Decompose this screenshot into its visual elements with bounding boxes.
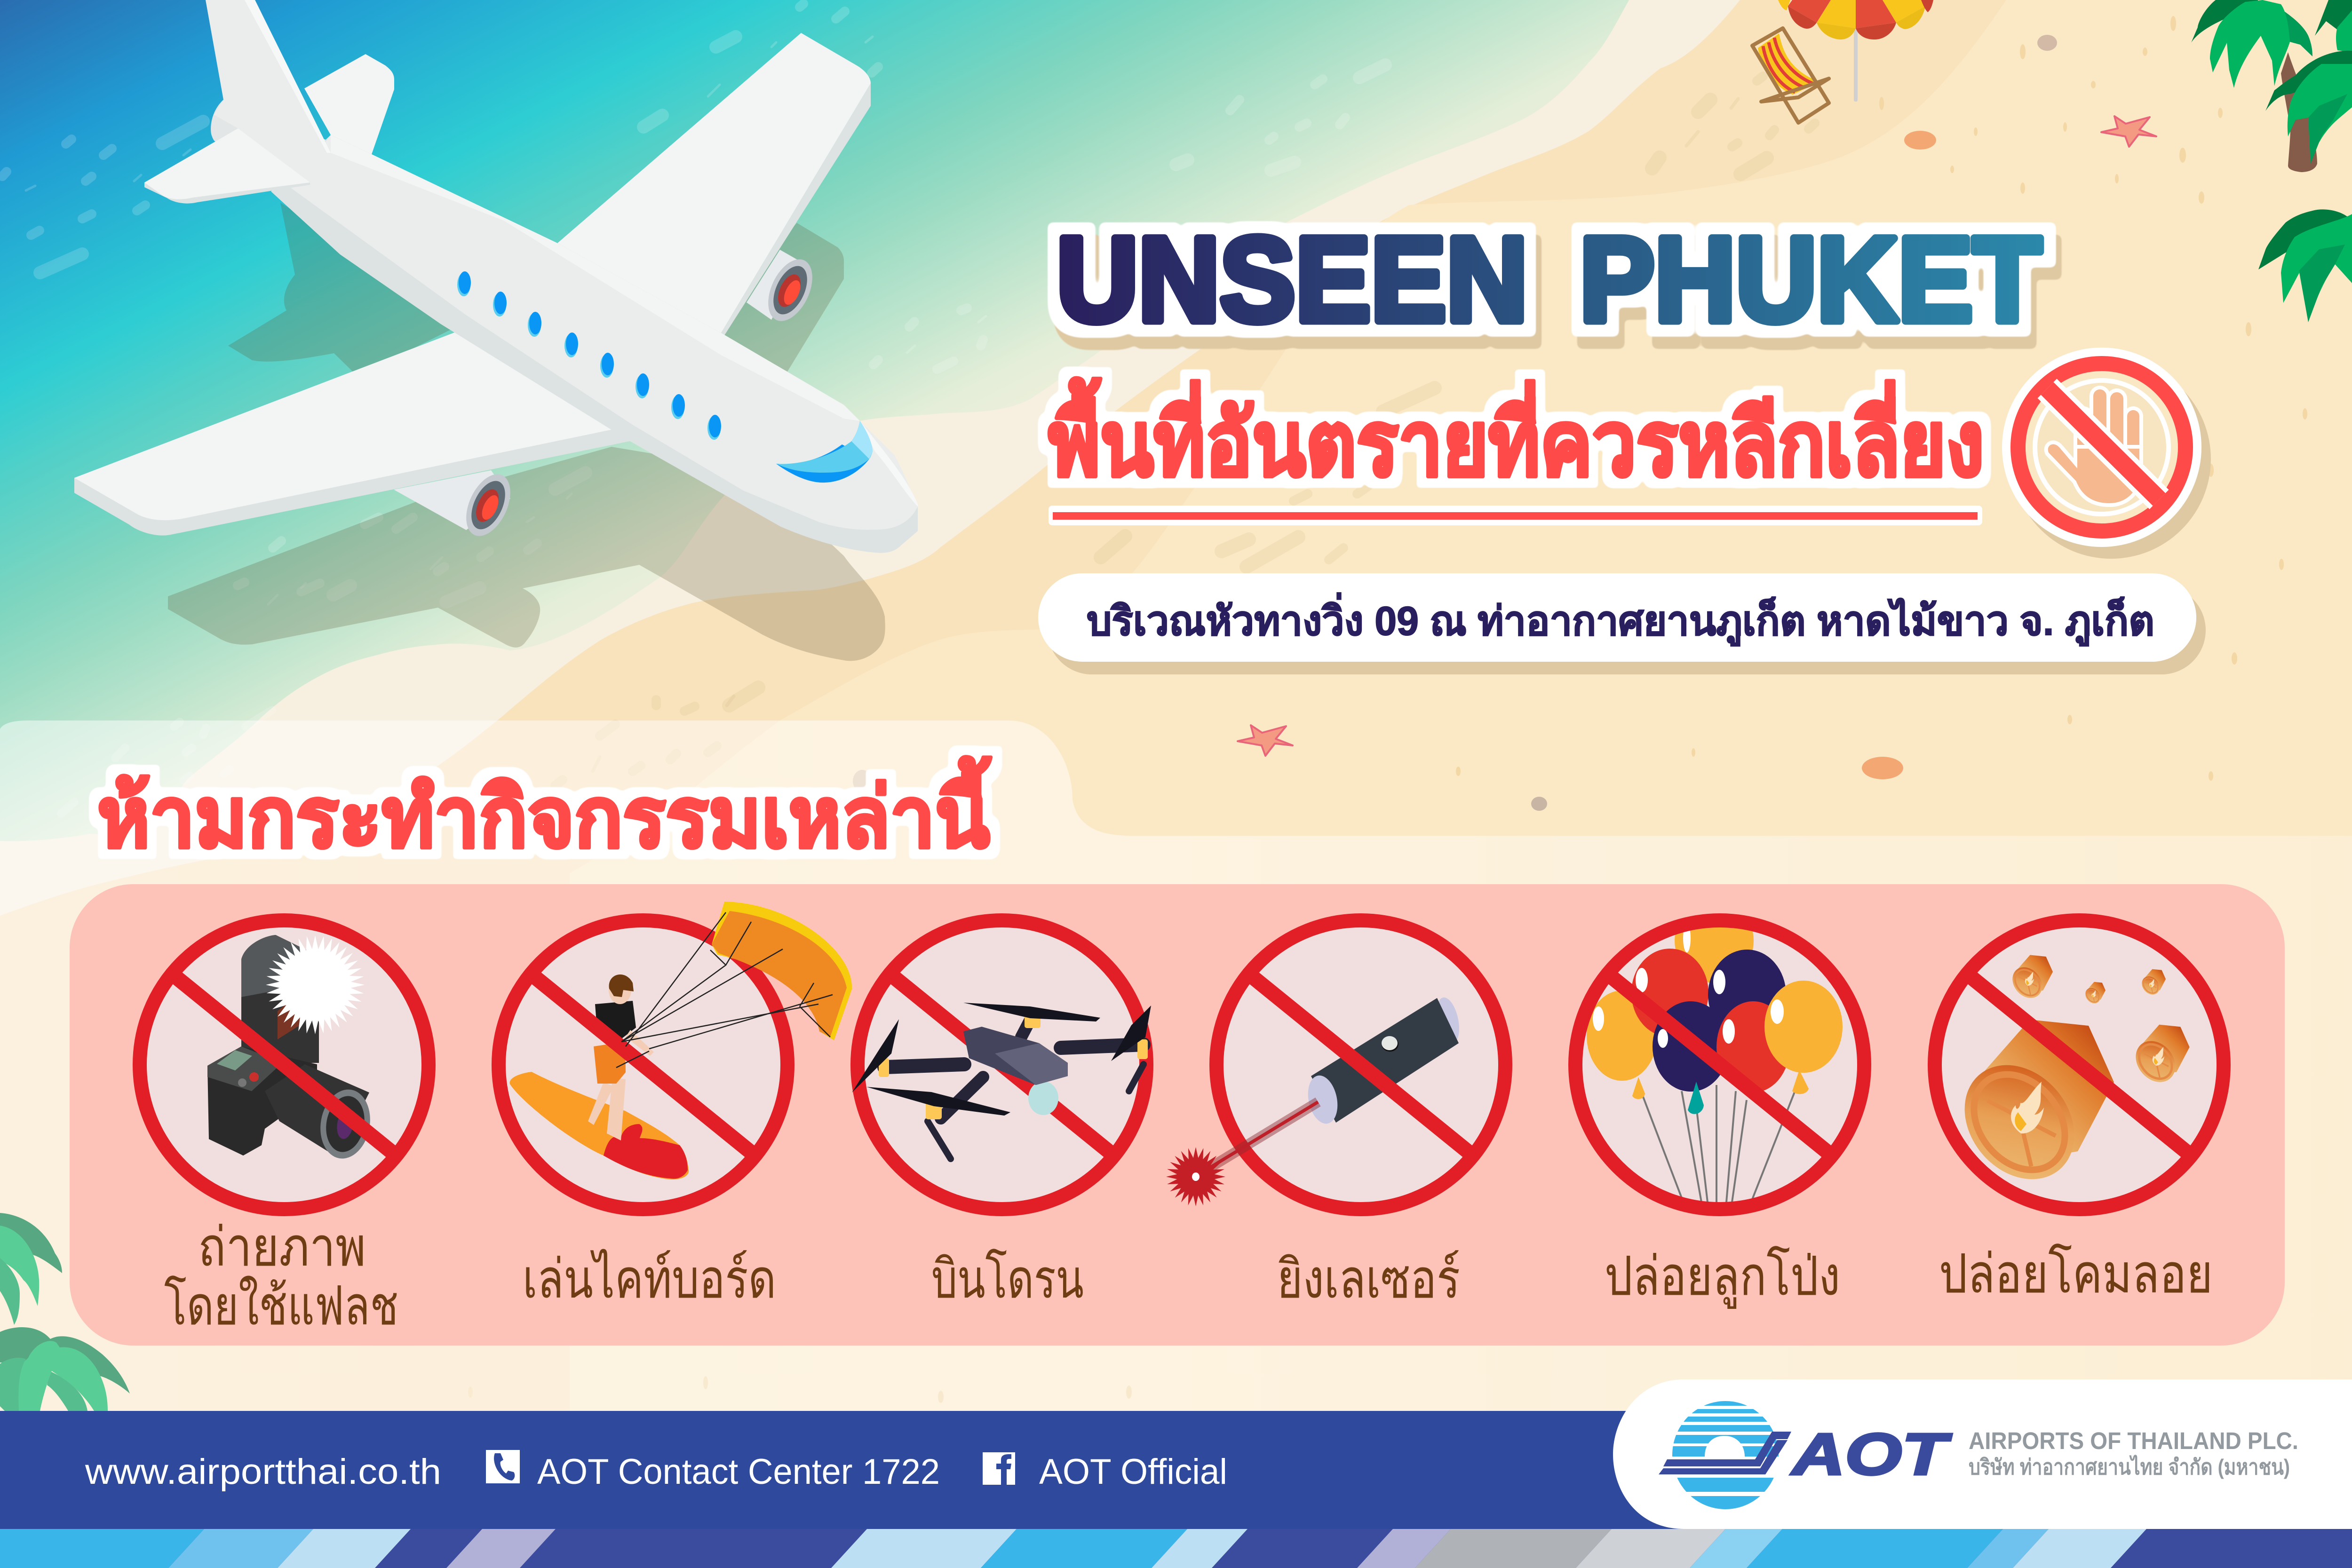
icon: phone	[486, 1450, 520, 1483]
airplane: cockpit window	[776, 421, 873, 483]
footer bar	[0, 1411, 2352, 1529]
airplane: rear stabiliser	[304, 54, 394, 154]
beach umbrella	[1778, 0, 1933, 102]
logo: AOT emblem	[1659, 1401, 1791, 1509]
airplane: tail fin	[206, 0, 331, 188]
activity: laser pointer	[1160, 920, 1505, 1309]
activity: flash photography	[140, 920, 429, 1336]
label: releasing balloons: ปล่อยลูกโป่ง	[1605, 1246, 1840, 1309]
airplane	[74, 0, 918, 553]
deck chair	[1752, 28, 1829, 123]
activity: releasing balloons	[1575, 898, 1864, 1309]
shells and starfish	[853, 35, 2156, 811]
icon: kite canopy	[616, 902, 852, 1068]
icon: balloons	[1587, 898, 1843, 1202]
footer: website: www.airportthai.co.th	[85, 1452, 441, 1492]
airplane: windows	[457, 271, 721, 440]
location pill	[1038, 573, 2206, 674]
title: UNSEEN PHUKET	[1057, 213, 2042, 347]
label: kiteboarding: เล่นไคท์บอร์ด	[523, 1249, 776, 1309]
heading: do not do these activities: ห้ามกระทำกิจกรรมเหล่านี้	[97, 756, 991, 864]
location text: บริเวณหัวทางวิ่ง 09 ณ ท่าอากาศยานภูเก็ต หาดไม้ขาว จ. ภูเก็ต	[1087, 592, 2154, 646]
title: UNSEEN PHUKET: PHUKET	[1580, 213, 2042, 347]
airplane: far engine	[747, 250, 821, 328]
plane shadow	[168, 203, 885, 661]
label: flash photography	[164, 1217, 398, 1336]
icon: sky lanterns	[1942, 955, 2190, 1201]
palm trees: bottom left	[0, 1213, 130, 1411]
icon: laser beam and spot	[1160, 1102, 1318, 1213]
subtitle underline	[1049, 506, 1982, 525]
sand ripples	[555, 76, 1815, 785]
activity: flying a drone	[852, 920, 1151, 1309]
palm trees: top right	[2191, 0, 2352, 322]
airplane: left wing	[74, 329, 633, 536]
footer: contact center: AOT Contact Center 1722	[537, 1452, 940, 1492]
background: lighter sand	[570, 0, 2352, 1411]
icon: laser pointer	[1304, 996, 1463, 1126]
footer stripes	[0, 1529, 2352, 1568]
airplane: tail plane	[144, 128, 310, 204]
icon: drone	[852, 1003, 1151, 1159]
activity: sky lanterns	[1935, 920, 2224, 1304]
activity: kiteboarding	[499, 902, 852, 1309]
label: sky lanterns: ปล่อยโคมลอย	[1939, 1243, 2213, 1304]
footer: official page: AOT Official	[1039, 1452, 1227, 1492]
airplane: fuselage	[211, 100, 918, 553]
panel: prohibited activities	[70, 884, 2285, 1346]
label: flash photography: ถ่ายภาพ	[198, 1217, 366, 1277]
icon: camera with flash	[207, 921, 379, 1163]
logo: company name	[1969, 1427, 2298, 1479]
logo: AOT wordmark: AOT	[1790, 1422, 1952, 1487]
label: flash photography: โดยใช้แฟลช	[164, 1275, 398, 1336]
logo: company name: AIRPORTS OF THAILAND PLC.	[1969, 1427, 2298, 1454]
label: flying a drone: บินโดรน	[931, 1249, 1084, 1309]
logo panel	[1613, 1379, 2352, 1529]
background: lower sand overlay panel	[0, 721, 2352, 1416]
label: laser pointer: ยิงเลเซอร์	[1277, 1249, 1460, 1309]
logo: company name: บริษัท ท่าอากาศยานไทย จำกัด (มหาชน)	[1969, 1455, 2290, 1479]
airplane: near engine	[394, 467, 519, 543]
icon: kite surfer	[510, 974, 689, 1180]
icon: facebook	[983, 1452, 1015, 1485]
title: UNSEEN PHUKET: UNSEEN	[1057, 213, 1528, 347]
subtitle: dangerous area to avoid: พื้นที่อันตรายที่ควรหลีกเลี่ยง	[1049, 378, 1984, 494]
airplane: right wing	[557, 33, 871, 335]
water ripples	[2, 4, 1385, 814]
icon: stop hand prohibition	[2002, 348, 2211, 559]
